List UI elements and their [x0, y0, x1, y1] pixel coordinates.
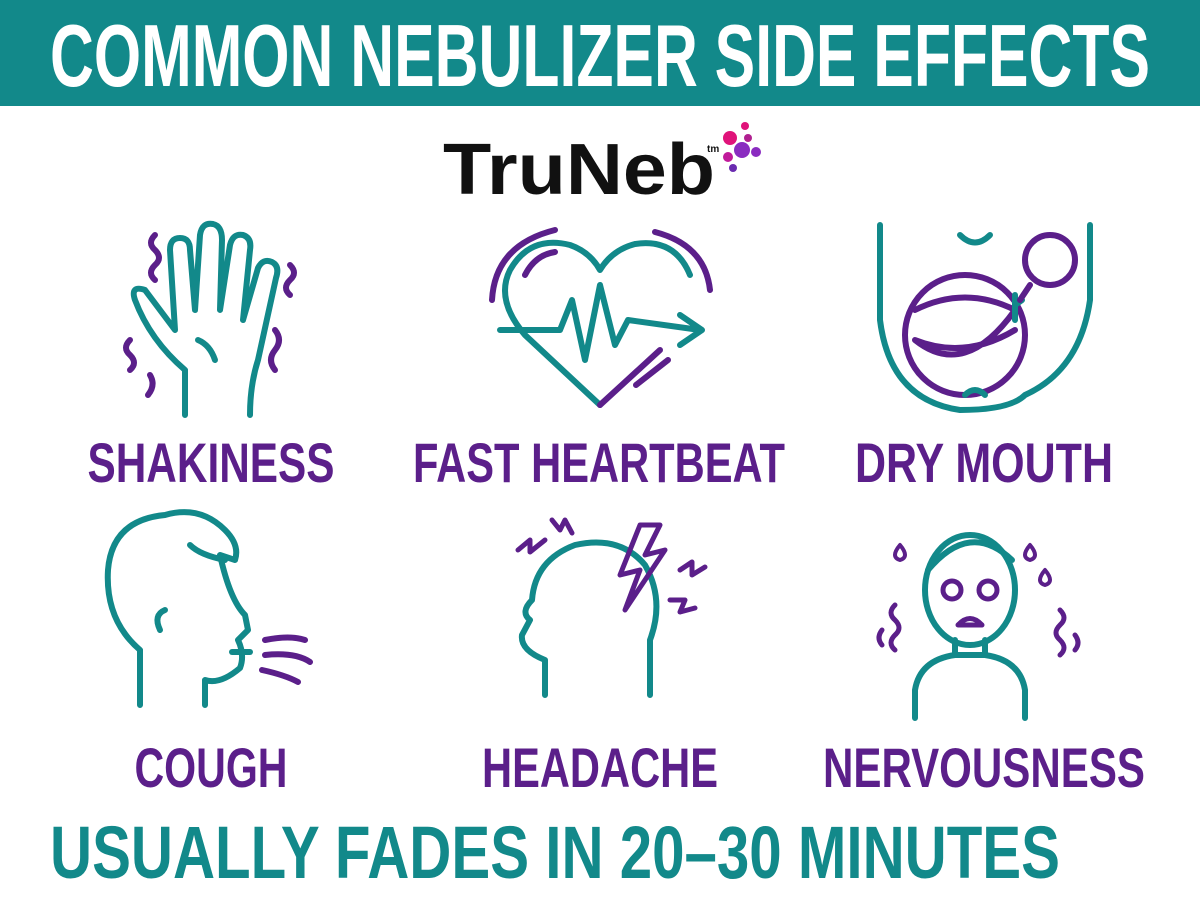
- label: shakiness: SHAKINESS: [88, 431, 334, 494]
- icon: shaky hand: [126, 224, 294, 415]
- logo: TruNeb: [443, 130, 715, 210]
- logo: tm: [707, 144, 719, 155]
- label: dry mouth: DRY MOUTH: [855, 431, 1113, 494]
- header banner: [0, 0, 1200, 106]
- icon: dry mouth: [880, 225, 1090, 410]
- label: fast heartbeat: FAST HEARTBEAT: [413, 431, 785, 494]
- icon: headache: [518, 520, 705, 695]
- icon: nervous person: [879, 535, 1078, 718]
- label: cough: COUGH: [134, 736, 288, 799]
- icon: coughing head: [108, 512, 310, 705]
- icon: heart with pulse: [492, 230, 710, 405]
- label: headache: HEADACHE: [482, 736, 718, 799]
